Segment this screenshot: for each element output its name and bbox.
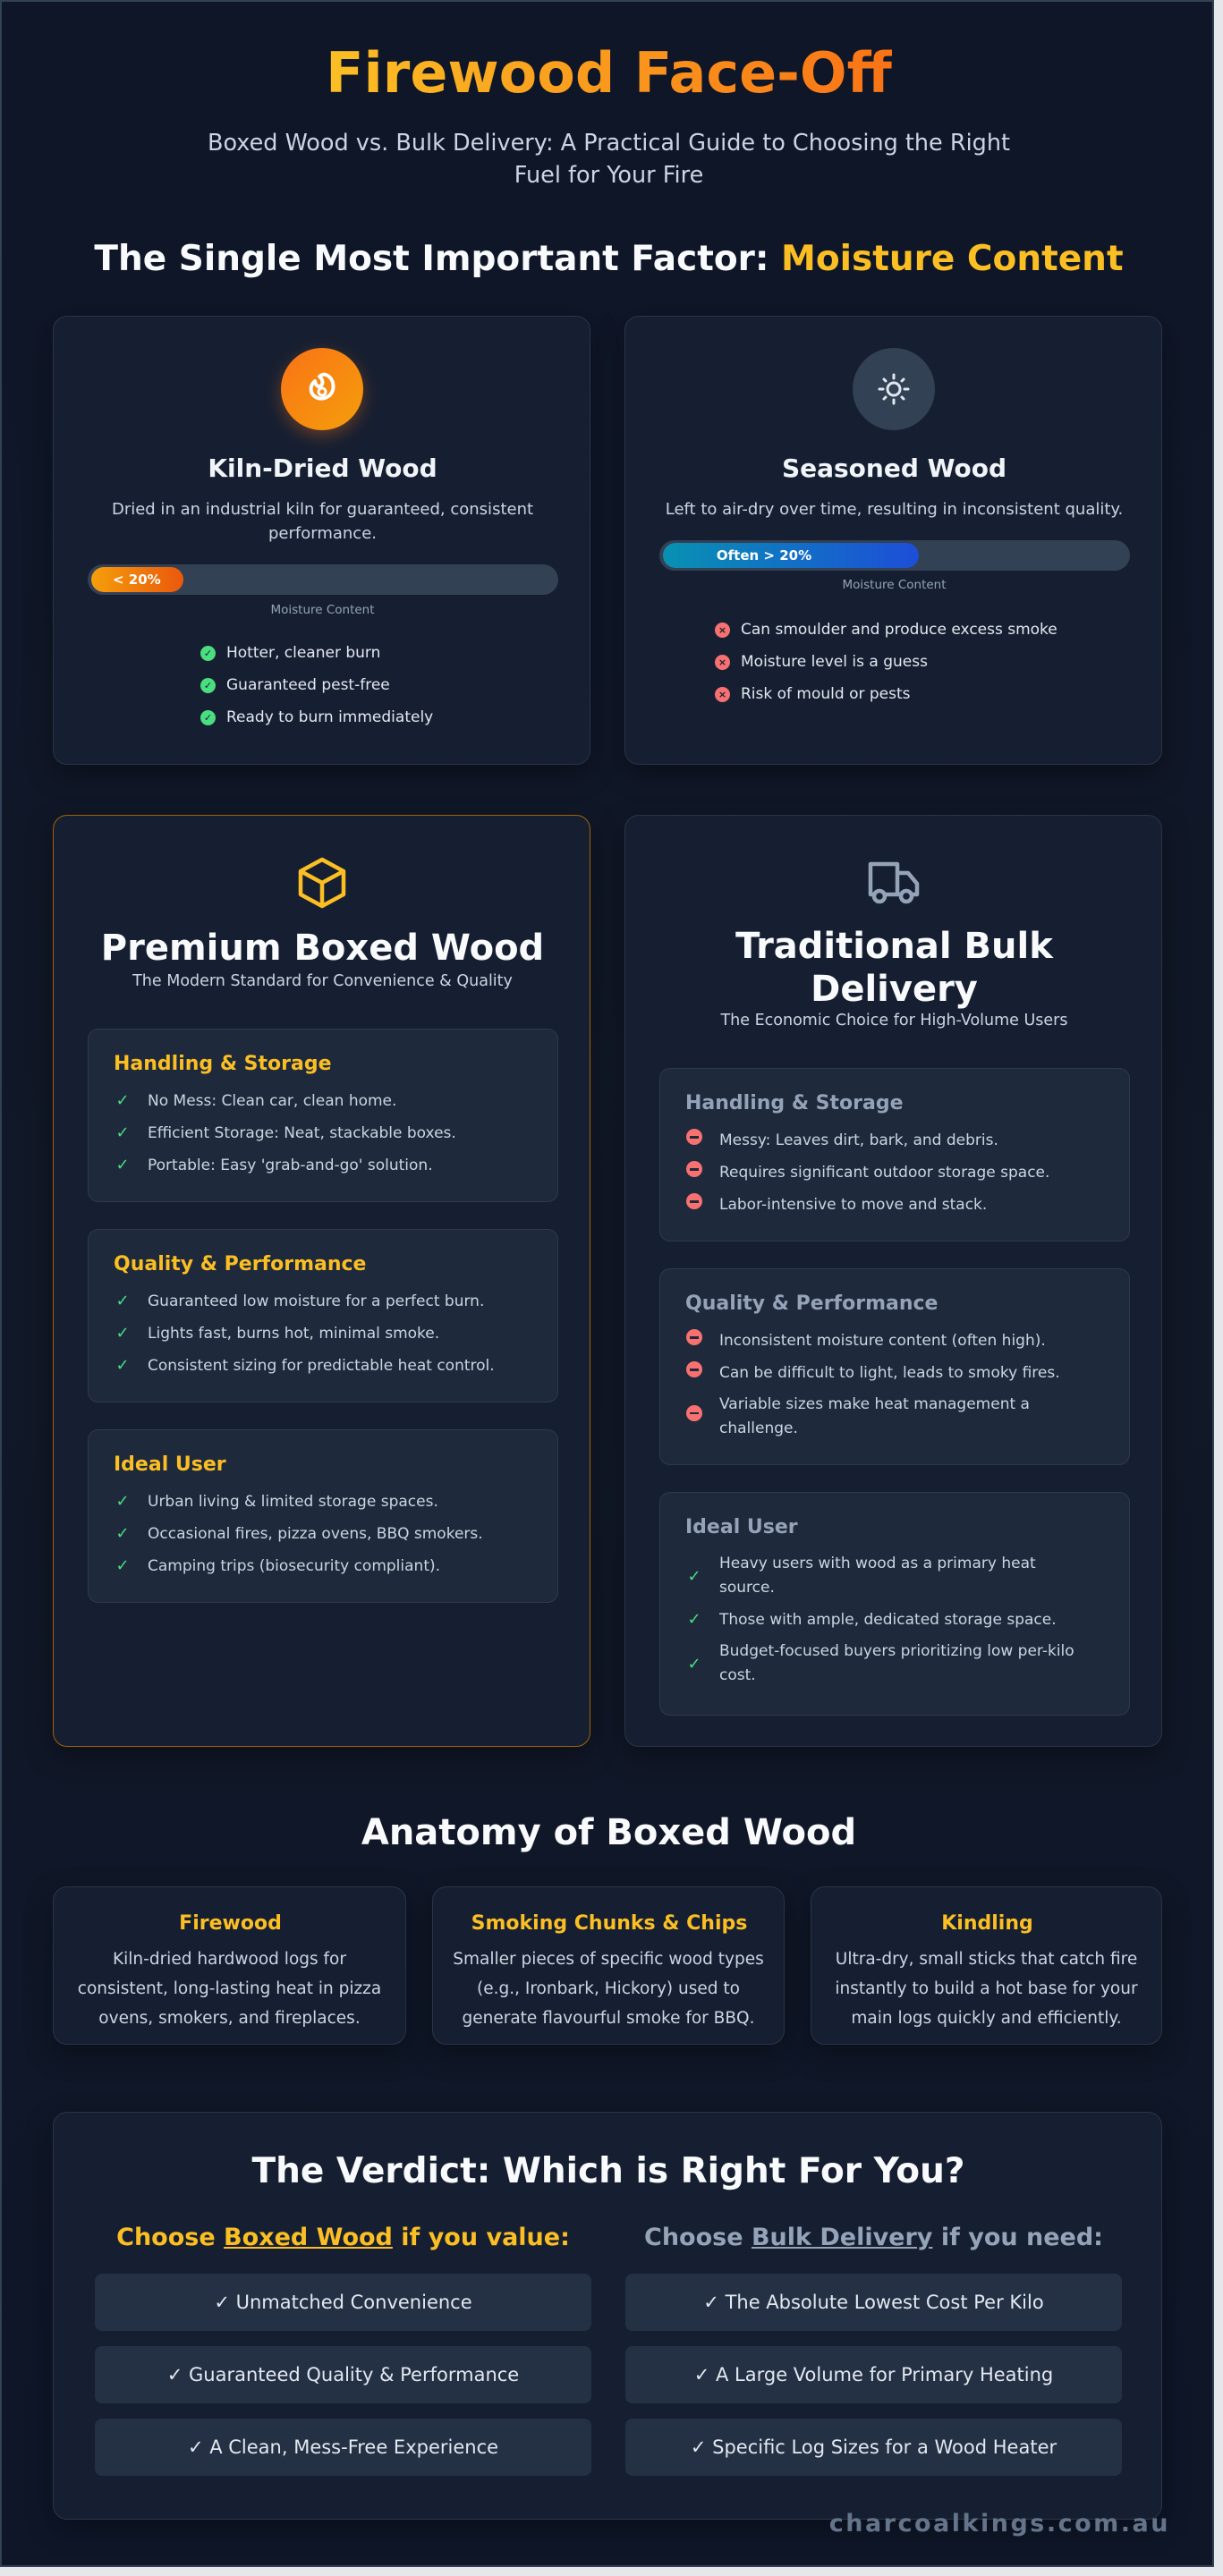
benefits list: ✓ (204, 648, 212, 658)
sub-panel: ideal user: Budget-focused buyers prioritizing low per-kilo cost. (719, 1642, 1074, 1684)
sub-panel: quality (88, 1229, 558, 1402)
sub-panel: quality: Can be difficult to light, leads to smoky fires. (719, 1364, 1060, 1382)
anatomy card: kindling (811, 1886, 1162, 2045)
sub-panel: handling: No Mess: Clean car, clean home. (148, 1092, 396, 1110)
verdict left items: ✓ Guaranteed Quality & Performance (167, 2364, 519, 2385)
sub-panel: handling: Labor-intensive to move and stack. (719, 1196, 987, 1214)
sub-panel: ideal user: ✓ (115, 1524, 130, 1543)
sub-panel: ideal user (88, 1429, 558, 1603)
anatomy card: firewood: ovens, smokers, and fireplaces. (98, 2009, 361, 2028)
anatomy card: kindling: Kindling (941, 1912, 1033, 1935)
sub-panel: ideal user: Camping trips (biosecurity compliant). (148, 1557, 440, 1575)
anatomy card: kindling: instantly to build a hot base for your (835, 1979, 1138, 1998)
sub-panel: handling: Handling & Storage (114, 1053, 332, 1075)
moisture bar: < 20% (113, 572, 161, 588)
verdict right heading: Choose Bulk Delivery if you need: (644, 2224, 1103, 2251)
sub-panel: quality: Inconsistent moisture content (often high). (719, 1332, 1046, 1350)
anatomy card: firewood: consistent, long-lasting heat in pizza (78, 1979, 381, 1998)
sub-panel: handling (659, 1068, 1130, 1241)
verdict title: The Verdict: Which is Right For You? (252, 2151, 964, 2191)
sub-panel: handling: Efficient Storage: Neat, stackable boxes. (148, 1124, 456, 1142)
verdict right items: ✓ The Absolute Lowest Cost Per Kilo (703, 2292, 1044, 2313)
sub-panel: ideal user: ✓ (687, 1610, 701, 1629)
sub-panel: quality: Lights fast, burns hot, minimal smoke. (148, 1325, 439, 1343)
panel: premium boxed wood (53, 815, 590, 1747)
benefits list: Guaranteed pest-free (226, 676, 390, 694)
title: Premium Boxed Wood (101, 928, 544, 969)
sub-panel: ideal user: Those with ample, dedicated storage space. (719, 1611, 1057, 1629)
anatomy card: kindling: Ultra-dry, small sticks that catch fire (836, 1950, 1137, 1969)
benefits list: Hotter, cleaner burn (226, 644, 380, 662)
sub-panel: ideal user: Urban living & limited storage spaces. (148, 1493, 438, 1511)
drawbacks list: Can smoulder and produce excess smoke (741, 621, 1057, 639)
benefits list: Ready to burn immediately (226, 708, 433, 726)
sub-panel: quality: Variable sizes make heat management a challenge. (719, 1395, 1030, 1437)
drawbacks list: × (718, 657, 726, 667)
drawbacks list (715, 621, 1057, 703)
verdict left items: ✓ Unmatched Convenience (214, 2292, 472, 2313)
icon: truck (868, 862, 920, 903)
panel: kiln-dried (53, 316, 590, 765)
title: Firewood Face-Off (326, 40, 892, 106)
anatomy card: smoking chunks (432, 1886, 785, 2045)
icon: flame (281, 348, 363, 430)
bar label: Moisture Content (842, 578, 947, 592)
heading: moisture: The Single Most Important Factor: Moisture Content (94, 239, 1124, 279)
drawbacks list: × (718, 624, 726, 635)
sub-panel: handling: Messy: Leaves dirt, bark, and debris. (719, 1131, 998, 1149)
card title: Seasoned Wood (782, 453, 1006, 483)
panel: bulk delivery (624, 815, 1162, 1747)
sub-panel: ideal user: ✓ (115, 1556, 130, 1575)
sub-panel: quality: ✓ (115, 1356, 130, 1375)
sub-panel: ideal user: ✓ (115, 1492, 130, 1511)
description: Dried in an industrial kiln for guaranteed, consistent performance. (112, 500, 533, 543)
subtitle: Boxed Wood vs. Bulk Delivery: A Practical Guide to Choosing the Right Fuel for Your Fire (208, 130, 1010, 189)
verdict right items (625, 2274, 1122, 2476)
sub-panel: quality: ✓ (115, 1324, 130, 1343)
panel: seasoned (624, 316, 1162, 765)
drawbacks list: Moisture level is a guess (741, 653, 928, 671)
subtitle: The Economic Choice for High-Volume Users (720, 1012, 1068, 1030)
sub-panel: ideal user: Ideal User (114, 1453, 226, 1476)
sub-panel: quality: Guaranteed low moisture for a perfect burn. (148, 1292, 484, 1310)
verdict left items: ✓ A Clean, Mess-Free Experience (188, 2436, 498, 2458)
verdict left items (95, 2274, 591, 2476)
sub-panel: quality: Quality & Performance (685, 1292, 938, 1315)
sub-panel: ideal user: ✓ (687, 1655, 701, 1673)
sub-panel: handling: ✓ (115, 1123, 130, 1142)
benefits list: ✓ (204, 712, 212, 723)
moisture bar: Often > 20% (717, 547, 811, 564)
subtitle: The Modern Standard for Convenience & Quality (132, 972, 513, 990)
anatomy card: kindling: main logs quickly and efficiently. (851, 2009, 1122, 2028)
sub-panel: quality: ✓ (115, 1292, 130, 1310)
benefits list: ✓ (204, 680, 212, 691)
footer: brand: charcoalkings.com.au (829, 2510, 1170, 2538)
heading: anatomy: Anatomy of Boxed Wood (361, 1812, 856, 1853)
verdict right items: ✓ A Large Volume for Primary Heating (694, 2364, 1053, 2385)
anatomy card: smoking chunks: (e.g., Ironbark, Hickory) used to (477, 1979, 740, 1998)
sub-panel: ideal user: Occasional fires, pizza ovens, BBQ smokers. (148, 1525, 483, 1543)
sub-panel: ideal user (659, 1492, 1130, 1716)
bar label: Moisture Content (270, 603, 375, 617)
verdict right items: ✓ Specific Log Sizes for a Wood Heater (691, 2436, 1057, 2458)
sub-panel: ideal user: Ideal User (685, 1516, 798, 1538)
anatomy card: smoking chunks: Smaller pieces of specific wood types (453, 1950, 764, 1969)
sub-panel: handling: ✓ (115, 1091, 130, 1110)
sub-panel: ideal user: ✓ (687, 1567, 701, 1585)
drawbacks list: Risk of mould or pests (741, 685, 911, 703)
sub-panel: handling: Handling & Storage (685, 1092, 904, 1114)
sub-panel: handling (88, 1029, 558, 1202)
sub-panel: quality: Consistent sizing for predictable heat control. (148, 1357, 495, 1375)
sub-panel: quality: Quality & Performance (114, 1253, 366, 1275)
title (735, 926, 1054, 1010)
anatomy card: firewood: Firewood (179, 1912, 282, 1935)
panel: verdict (53, 2112, 1162, 2520)
anatomy card: firewood: Kiln-dried hardwood logs for (113, 1950, 346, 1969)
icon: box (299, 857, 345, 909)
drawbacks list: × (718, 689, 726, 699)
title: Delivery (811, 969, 978, 1010)
moisture bar (659, 540, 1130, 571)
title: Traditional Bulk (735, 926, 1053, 967)
benefits list (200, 644, 433, 726)
verdict left heading: Choose Boxed Wood if you value: (116, 2224, 570, 2251)
card title: Kiln-Dried Wood (208, 453, 437, 483)
sub-panel: handling: Portable: Easy 'grab-and-go' solution. (148, 1157, 433, 1174)
sub-panel: ideal user: Heavy users with wood as a primary heat source. (719, 1555, 1036, 1597)
moisture bar (88, 564, 558, 595)
sub-panel: handling: Requires significant outdoor storage space. (719, 1164, 1049, 1182)
sub-panel: handling: ✓ (115, 1156, 130, 1174)
icon: sun (853, 348, 935, 430)
anatomy card: smoking chunks: generate flavourful smoke for BBQ. (462, 2009, 754, 2028)
sub-panel: quality (659, 1268, 1130, 1465)
description: Left to air-dry over time, resulting in inconsistent quality. (666, 500, 1123, 519)
anatomy card: firewood (53, 1886, 406, 2045)
anatomy card: smoking chunks: Smoking Chunks & Chips (471, 1912, 747, 1935)
